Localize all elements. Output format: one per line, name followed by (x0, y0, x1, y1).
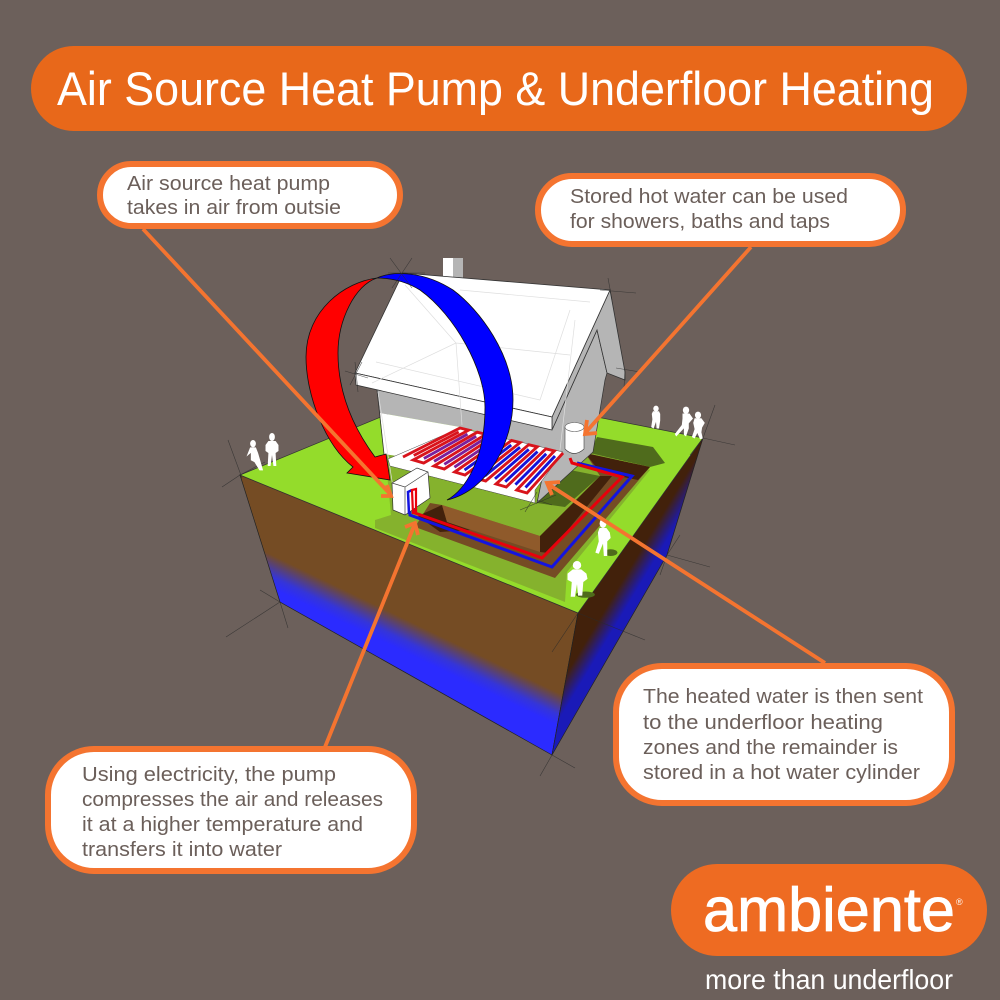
callout: air intake: Air source heat pump (127, 172, 330, 195)
red warm air arrow (306, 278, 390, 480)
gable overhang (552, 290, 625, 430)
central soil island (442, 458, 612, 553)
arrow: underfloor zones (547, 482, 825, 663)
callout: air intake: takes in air from outsie (127, 196, 341, 219)
ground block: right soil face (552, 438, 703, 755)
purple return loop (424, 434, 494, 467)
callout: compression: it at a higher temperature and (82, 813, 363, 836)
blue cool air arrow (377, 274, 513, 500)
callout: heated water distribution: stored in a hot water cylinder (643, 761, 920, 784)
blue return pipe (409, 463, 632, 567)
callout: compression: Using electricity, the pump (82, 763, 336, 786)
callout: stored hot water (538, 176, 903, 244)
callout: compression (48, 749, 414, 871)
person: left pair walking (247, 440, 263, 470)
lit front wall (380, 413, 460, 457)
roof fascia (355, 373, 552, 430)
people figures (247, 406, 705, 598)
callout: heated water distribution (616, 666, 952, 803)
logo: ambiente: ® (956, 897, 963, 907)
leader lines with arrowheads (143, 229, 825, 747)
red flow pipe (412, 458, 622, 558)
callout: air intake (100, 164, 400, 226)
arrow: air intake (143, 229, 391, 496)
gable wall (537, 330, 607, 503)
logo: ambiente (671, 864, 987, 956)
roof slope (355, 273, 610, 417)
title banner (31, 46, 967, 131)
tagline: more than underfloor (705, 964, 953, 995)
callout: stored hot water: for showers, baths and taps (570, 210, 830, 233)
ground block (240, 388, 703, 755)
flow pipes (409, 458, 632, 567)
person: side path (595, 519, 617, 556)
callout: heated water distribution: The heated water is then sent (643, 685, 923, 708)
callout: heated water distribution: zones and the remainder is (643, 736, 898, 759)
floor slab (388, 428, 563, 503)
ground block: left soil face (240, 475, 578, 755)
logo: ambiente: ambiente (703, 876, 955, 945)
callout: heated water distribution: to the underfloor heating (643, 711, 883, 734)
pipe trench (415, 453, 650, 578)
person: right pair two (692, 412, 705, 439)
blue return loop (464, 443, 555, 488)
arrow: hot water cylinder (585, 247, 751, 434)
shaded front wall (377, 388, 563, 453)
person: right pair one (675, 407, 693, 437)
underfloor heating loops (403, 428, 563, 493)
callout: stored hot water: Stored hot water can be used (570, 185, 848, 208)
ground block: lawn top (240, 388, 703, 613)
house (355, 258, 625, 503)
ground shadow on lawn (375, 452, 650, 602)
title banner: Air Source Heat Pump & Underfloor Heating (57, 62, 934, 115)
person: front (568, 561, 595, 598)
icon: hot water cylinder (565, 422, 584, 454)
person: right single (651, 406, 660, 428)
chimney (443, 258, 463, 280)
dark house shadow on lawn (590, 437, 665, 467)
callout: compression: transfers it into water (82, 838, 282, 861)
faint structure lines (372, 285, 590, 500)
construction marks (222, 258, 735, 776)
red loop (403, 428, 563, 493)
person: left pair standing (266, 433, 278, 466)
icon: heat pump unit (392, 468, 430, 515)
arrow: compressor (325, 523, 418, 747)
callout: compression: compresses the air and releases (82, 788, 383, 811)
